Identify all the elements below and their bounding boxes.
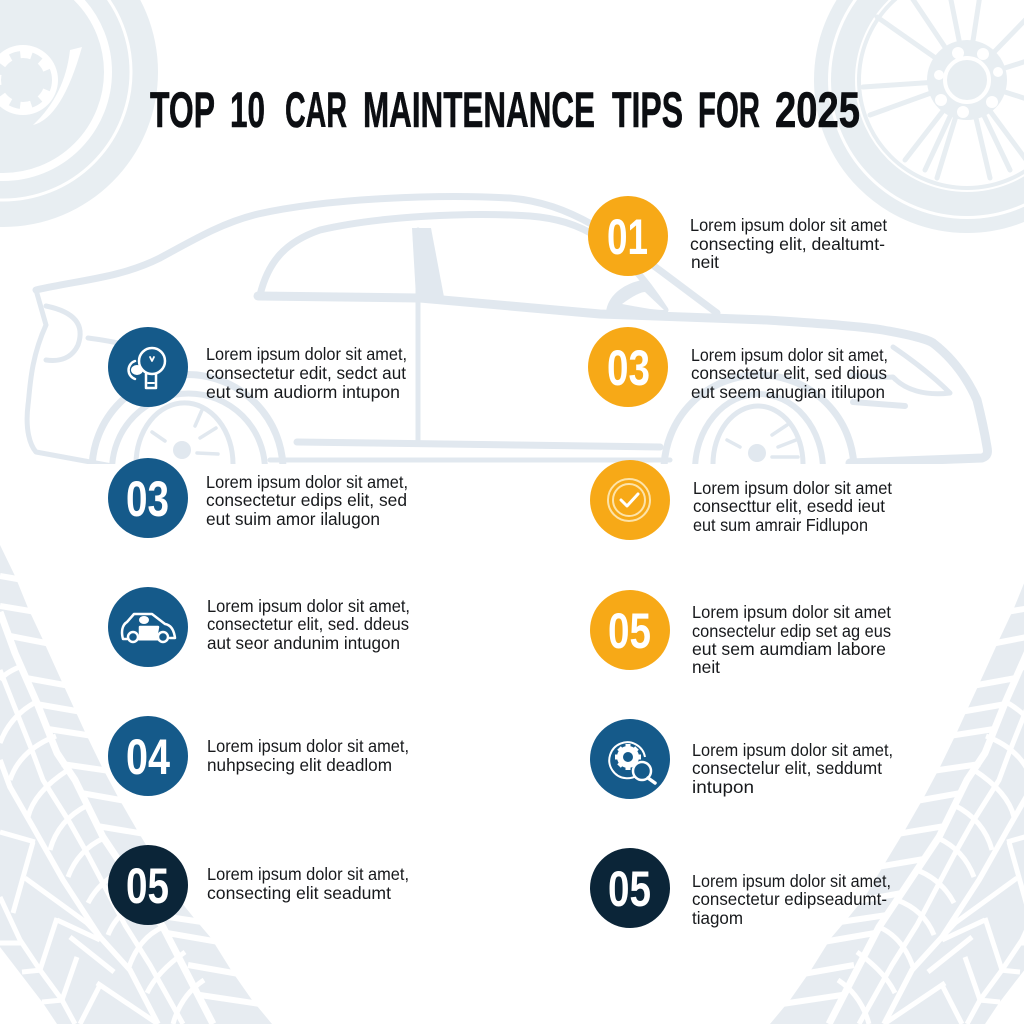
left item 1: consectetur edit, sedct aut: [206, 363, 406, 383]
left item 2: consectetur edips elit, sed: [206, 490, 407, 510]
left item 1: eut sum audiorm intupon: [206, 382, 400, 402]
right item 4: Lorem ipsum dolor sit amet: [692, 602, 891, 622]
left item 1: Lorem ipsum dolor sit amet,: [206, 344, 407, 364]
left item 1: [108, 327, 407, 407]
background: left tire tread: [0, 545, 272, 1024]
right item 6: [590, 848, 891, 928]
left item 4: nuhpsecing elit deadlom: [207, 755, 392, 775]
right item 5: [590, 719, 893, 799]
left item 5: [108, 845, 409, 925]
background: car outline: [27, 197, 987, 470]
left item 3: consectetur elit, sed. ddeus: [207, 614, 409, 634]
right item 1: Lorem ipsum dolor sit amet: [690, 215, 887, 235]
title: MAINTENANCE: [363, 82, 595, 138]
right item 5: consectelur elit, seddumt: [692, 758, 882, 778]
right item 4: 05: [608, 603, 651, 659]
right item 5: intupon: [692, 777, 754, 797]
left item 4: [108, 716, 409, 796]
icon: gauge key: [129, 348, 165, 388]
left item 2: eut suim amor ilalugon: [206, 509, 380, 529]
background: top-left wheel: [0, 0, 158, 227]
title: 10: [230, 82, 265, 138]
left item 3: [108, 587, 410, 667]
right item 1: consecting elit, dealtumt-: [690, 234, 885, 254]
title: FOR: [698, 82, 760, 138]
left item 5: Lorem ipsum dolor sit amet,: [207, 864, 409, 884]
right item 2: eut seem anugian itilupon: [691, 382, 885, 402]
title: 2025: [775, 82, 860, 138]
right item 6: Lorem ipsum dolor sit amet,: [692, 871, 891, 891]
left item 3: aut seor andunim intugon: [207, 633, 400, 653]
left item 4: Lorem ipsum dolor sit amet,: [207, 736, 409, 756]
right item 6: consectetur edipseadumt-: [692, 889, 887, 909]
left item 2: Lorem ipsum dolor sit amet,: [206, 472, 408, 492]
right item 3: eut sum amrair Fidlupon: [693, 515, 868, 535]
left item 2: 03: [126, 471, 169, 527]
icon: check badge: [608, 479, 650, 521]
right item 2: 03: [607, 340, 650, 396]
right item 2: [588, 327, 888, 407]
title: CAR: [285, 82, 347, 138]
title: TOP: [150, 82, 215, 138]
icon: car: [122, 614, 175, 642]
left item 4: 04: [126, 729, 170, 785]
left item 5: 05: [126, 858, 169, 914]
right item 6: 05: [608, 861, 651, 917]
right item 4: [590, 590, 891, 677]
right item 3: Lorem ipsum dolor sit amet: [693, 478, 892, 498]
right item 3: [590, 460, 892, 540]
left item 2: [108, 458, 408, 538]
background: right tire tread: [770, 545, 1024, 1024]
right item 6: tiagom: [692, 908, 743, 928]
right item 2: Lorem ipsum dolor sit amet,: [691, 345, 888, 365]
right item 5: Lorem ipsum dolor sit amet,: [692, 740, 893, 760]
icon: gear and magnifier: [609, 742, 655, 783]
left item 5: consecting elit seadumt: [207, 883, 391, 903]
left item 3: Lorem ipsum dolor sit amet,: [207, 596, 410, 616]
right item 4: neit: [692, 657, 720, 677]
right item 1: [588, 196, 887, 276]
right item 4: eut sem aumdiam labore: [692, 639, 886, 659]
title: TIPS: [612, 82, 683, 138]
right item 1: 01: [607, 209, 648, 265]
right item 4: consectelur edip set ag eus: [692, 621, 891, 641]
right item 3: consecttur elit, esedd ieut: [693, 496, 885, 516]
background: top-right wheel: [821, 0, 1024, 226]
right item 1: neit: [691, 252, 719, 272]
right item 2: consectetur elit, sed dious: [691, 363, 887, 383]
title: [150, 82, 860, 138]
